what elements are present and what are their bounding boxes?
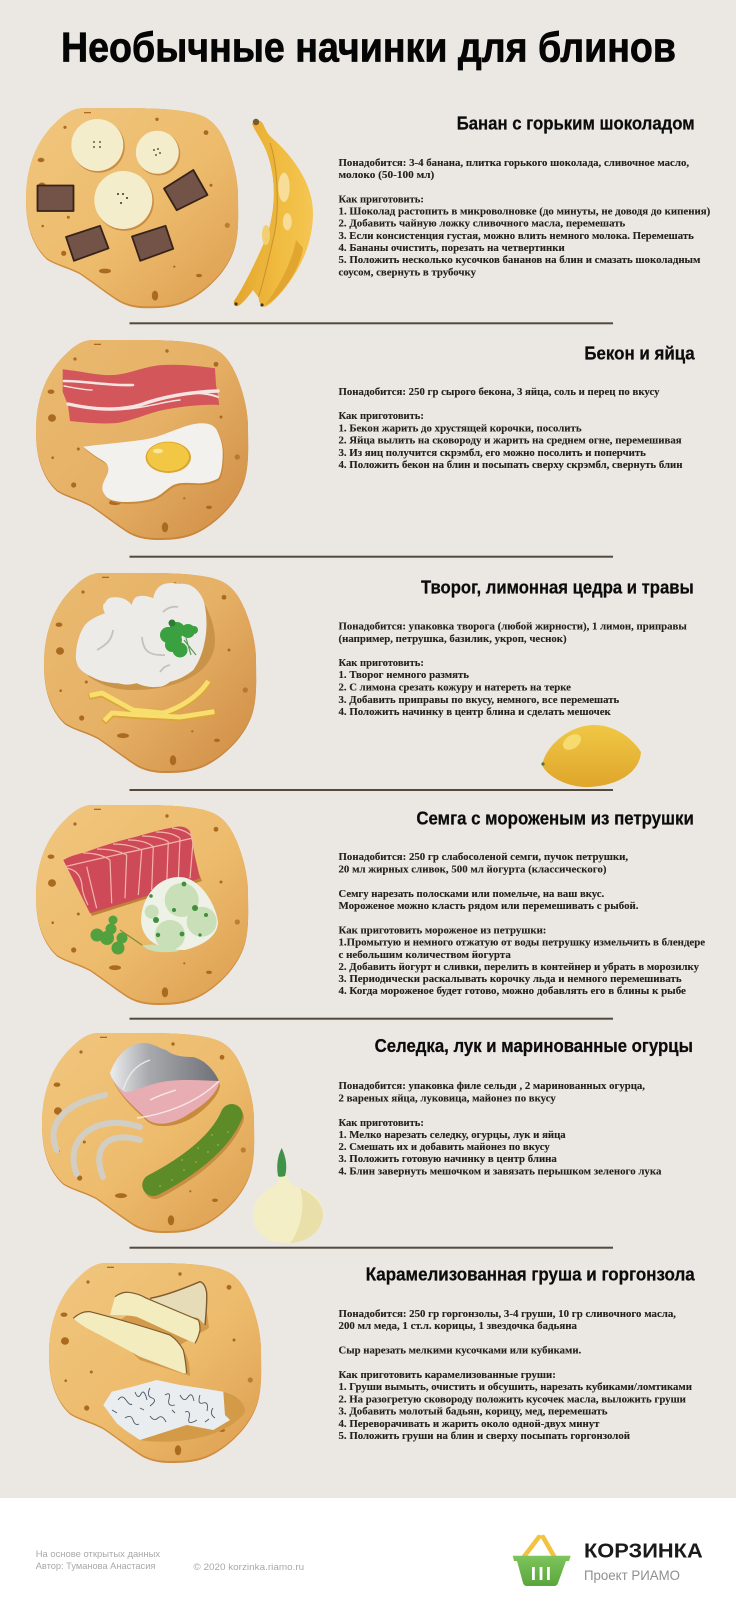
text block: banana recipe: 2. Добавить чайную ложку сливочного масла, перемешать xyxy=(338,218,625,230)
footer source text xyxy=(36,1549,304,1573)
text block: banana recipe: Как приготовить: xyxy=(338,194,424,206)
text block: herring recipe: 1. Мелко нарезать селедку, огурцы, лук и яйца xyxy=(338,1129,566,1141)
heading: curd: Творог, лимонная цедра и травы xyxy=(421,576,694,597)
icon: lemon xyxy=(541,725,641,787)
text block: bacon recipe: 1. Бекон жарить до хрустящей корочки, посолить xyxy=(338,422,582,434)
pear slices xyxy=(73,1282,209,1376)
text block: pear recipe: 3. Добавить молотый бадьян, корицу, мед, перемешать xyxy=(338,1406,608,1418)
text block: salmon recipe: Мороженое можно класть рядом или перемешивать с рыбой. xyxy=(338,900,639,912)
text block: bacon recipe: Как приготовить: xyxy=(338,410,424,422)
text block: herring recipe xyxy=(338,1080,662,1178)
text block: bacon recipe: 2. Яйца вылить на сковороду и жарить на среднем огне, перемешивая xyxy=(338,434,682,446)
text block: salmon recipe: с небольшим количеством йогурта xyxy=(338,949,511,961)
text block: pear recipe: 4. Переворачивать и жарить около одной-двух минут xyxy=(338,1418,600,1430)
text block: salmon recipe: 1.Промытую и немного отжатую от воды петрушку измельчить в блендере xyxy=(338,936,705,948)
pancake 6 xyxy=(49,1263,261,1463)
footer source text: На основе открытых данных xyxy=(36,1549,160,1560)
panel: banana and chocolate pancake xyxy=(26,108,313,308)
text block: banana recipe: Понадобится: 3-4 банана, плитка горького шоколада, сливочное масло, xyxy=(338,157,689,169)
banana xyxy=(234,119,313,307)
text block: pear recipe xyxy=(338,1308,693,1442)
cottage cheese xyxy=(76,583,215,690)
text block: curd recipe: Как приготовить: xyxy=(338,657,424,669)
text block: curd recipe: Понадобится: упаковка творога (любой жирности), 1 лимон, приправы xyxy=(338,620,687,632)
text block: curd recipe: 3. Добавить приправы по вкусу, немного, все перемешать xyxy=(338,694,619,706)
text block: banana recipe: 1. Шоколад растопить в микроволновке (до минуты, не доводя до кипения) xyxy=(338,206,711,218)
heading: salmon: Семга с мороженым из петрушки xyxy=(416,807,694,828)
text block: herring recipe: Как приготовить: xyxy=(338,1117,424,1129)
footer source text: © 2020 korzinka.riamo.ru xyxy=(193,1562,304,1573)
text block: pear recipe: Понадобится: 250 гр горгонзолы, 3-4 груши, 10 гр сливочного масла, xyxy=(338,1308,676,1320)
text block: bacon recipe: 3. Из яиц получится скрэмбл, его можно посолить и поперчить xyxy=(338,447,646,459)
text block: banana recipe: 5. Положить несколько кусочков бананов на блин и смазать шоколадным xyxy=(338,254,701,266)
text block: pear recipe: Как приготовить карамелизованные груши: xyxy=(338,1369,556,1381)
text block: herring recipe: 4. Блин завернуть мешочком и завязать перышком зеленого лука xyxy=(338,1166,662,1178)
heading: pear: Карамелизованная груша и горгонзола xyxy=(366,1264,695,1285)
parsley xyxy=(160,620,198,658)
salmon fillet xyxy=(63,827,202,916)
text block: salmon recipe: Понадобится: 250 гр слабосоленой семги, пучок петрушки, xyxy=(338,851,628,863)
heading: bacon: Бекон и яйца xyxy=(584,342,695,363)
panel: curd, lemon zest and herbs pancake xyxy=(44,573,256,773)
text block: curd recipe: 2. С лимона срезать кожуру и натереть на терке xyxy=(338,682,571,694)
panel: bacon and eggs pancake xyxy=(36,340,248,540)
pancake 4 xyxy=(36,805,248,1005)
heading: banana: Банан с горьким шоколадом xyxy=(457,112,695,133)
text block: pear recipe: 5. Положить груши на блин и сверху посыпать горгонзолой xyxy=(338,1430,631,1442)
text block: salmon recipe: Как приготовить мороженое из петрушки: xyxy=(338,924,546,936)
text block: curd recipe xyxy=(338,620,687,718)
fried egg xyxy=(83,423,224,504)
icon: onion xyxy=(253,1148,323,1243)
panel: herring, onion and pickles pancake xyxy=(42,1033,254,1233)
text block: curd recipe: (например, петрушка, базилик, укроп, чеснок) xyxy=(338,633,567,645)
text block: banana recipe: молоко (50-100 мл) xyxy=(338,169,435,181)
text block: bacon recipe: 4. Положить бекон на блин и посыпать сверху скрэмбл, свернуть блин xyxy=(338,459,683,471)
text block: curd recipe: 4. Положить начинку в центр блина и сделать мешочек xyxy=(338,706,611,718)
text block: salmon recipe: Семгу нарезать полосками или помельче, на ваш вкус. xyxy=(338,888,604,900)
text block: salmon recipe xyxy=(338,851,705,997)
text block: salmon recipe: 20 мл жирных сливок, 500 мл йогурта (классического) xyxy=(338,864,607,876)
text block: pear recipe: 2. На разогретую сковороду положить кусочек масла, выложить груши xyxy=(338,1394,687,1406)
text block: herring recipe: 2 вареных яйца, луковица, майонез по вкусу xyxy=(338,1092,556,1104)
gorgonzola xyxy=(103,1380,245,1442)
footer source text: Автор: Туманова Анастасия xyxy=(36,1561,155,1572)
chocolate pieces xyxy=(38,170,208,261)
title: Необычные начинки для блинов xyxy=(61,24,676,70)
logo wordmark: Проект РИАМО xyxy=(584,1567,680,1583)
lemon zest xyxy=(92,683,212,720)
text block: herring recipe: 3. Положить готовую начинку в центр блина xyxy=(338,1153,557,1165)
text block: banana recipe: соусом, свернуть в трубочку xyxy=(338,266,476,278)
text block: salmon recipe: 3. Периодически раскалывать корочку льда и немного перемешивать xyxy=(338,973,682,985)
parsley xyxy=(90,916,142,954)
heading: herring: Селедка, лук и маринованные огурцы xyxy=(375,1035,693,1056)
logo basket icon xyxy=(513,1537,571,1586)
herring xyxy=(110,1043,220,1126)
logo wordmark: КОРЗИНКА xyxy=(584,1540,703,1562)
panel: caramelized pear and gorgonzola pancake xyxy=(49,1263,261,1463)
pancake 3 xyxy=(44,573,256,773)
text block: banana recipe: 4. Бананы очистить, порезать на четвертинки xyxy=(338,242,565,254)
text block: pear recipe: 200 мл меда, 1 ст.л. корицы, 1 звездочка бадьяна xyxy=(338,1320,577,1332)
banana slices xyxy=(71,119,180,231)
text block: herring recipe: 2. Смешать их и добавить майонез по вкусу xyxy=(338,1141,550,1153)
text block: banana recipe: 3. Если консистенция густая, можно влить немного молока. Перемешать xyxy=(338,230,694,242)
pancake 1 xyxy=(26,108,238,308)
footer xyxy=(0,1498,736,1620)
text block: bacon recipe xyxy=(338,386,683,471)
text block: salmon recipe: 2. Добавить йогурт и сливки, перелить в контейнер и убрать в морозилку xyxy=(338,961,699,973)
pancake 2 xyxy=(36,340,248,540)
text block: herring recipe: Понадобится: упаковка филе сельди , 2 маринованных огурца, xyxy=(338,1080,645,1092)
onion rings xyxy=(53,1095,140,1177)
text block: banana recipe xyxy=(338,157,711,278)
text block: curd recipe: 1. Творог немного размять xyxy=(338,669,469,681)
bacon xyxy=(63,365,219,423)
parsley ice cream xyxy=(141,877,218,952)
panel: salmon with parsley ice cream pancake xyxy=(36,805,248,1005)
text block: pear recipe: 1. Груши вымыть, очистить и обсушить, нарезать кубиками/ломтиками xyxy=(338,1381,693,1393)
pancake 5 xyxy=(42,1033,254,1233)
text block: bacon recipe: Понадобится: 250 гр сырого бекона, 3 яйца, соль и перец по вкусу xyxy=(338,386,660,398)
text block: salmon recipe: 4. Когда мороженое будет готово, можно добавлять его в блины к рыбе xyxy=(338,985,686,997)
text block: pear recipe: Сыр нарезать мелкими кусочками или кубиками. xyxy=(338,1344,581,1356)
logo wordmark xyxy=(584,1540,703,1583)
pickled cucumber xyxy=(153,1115,233,1188)
